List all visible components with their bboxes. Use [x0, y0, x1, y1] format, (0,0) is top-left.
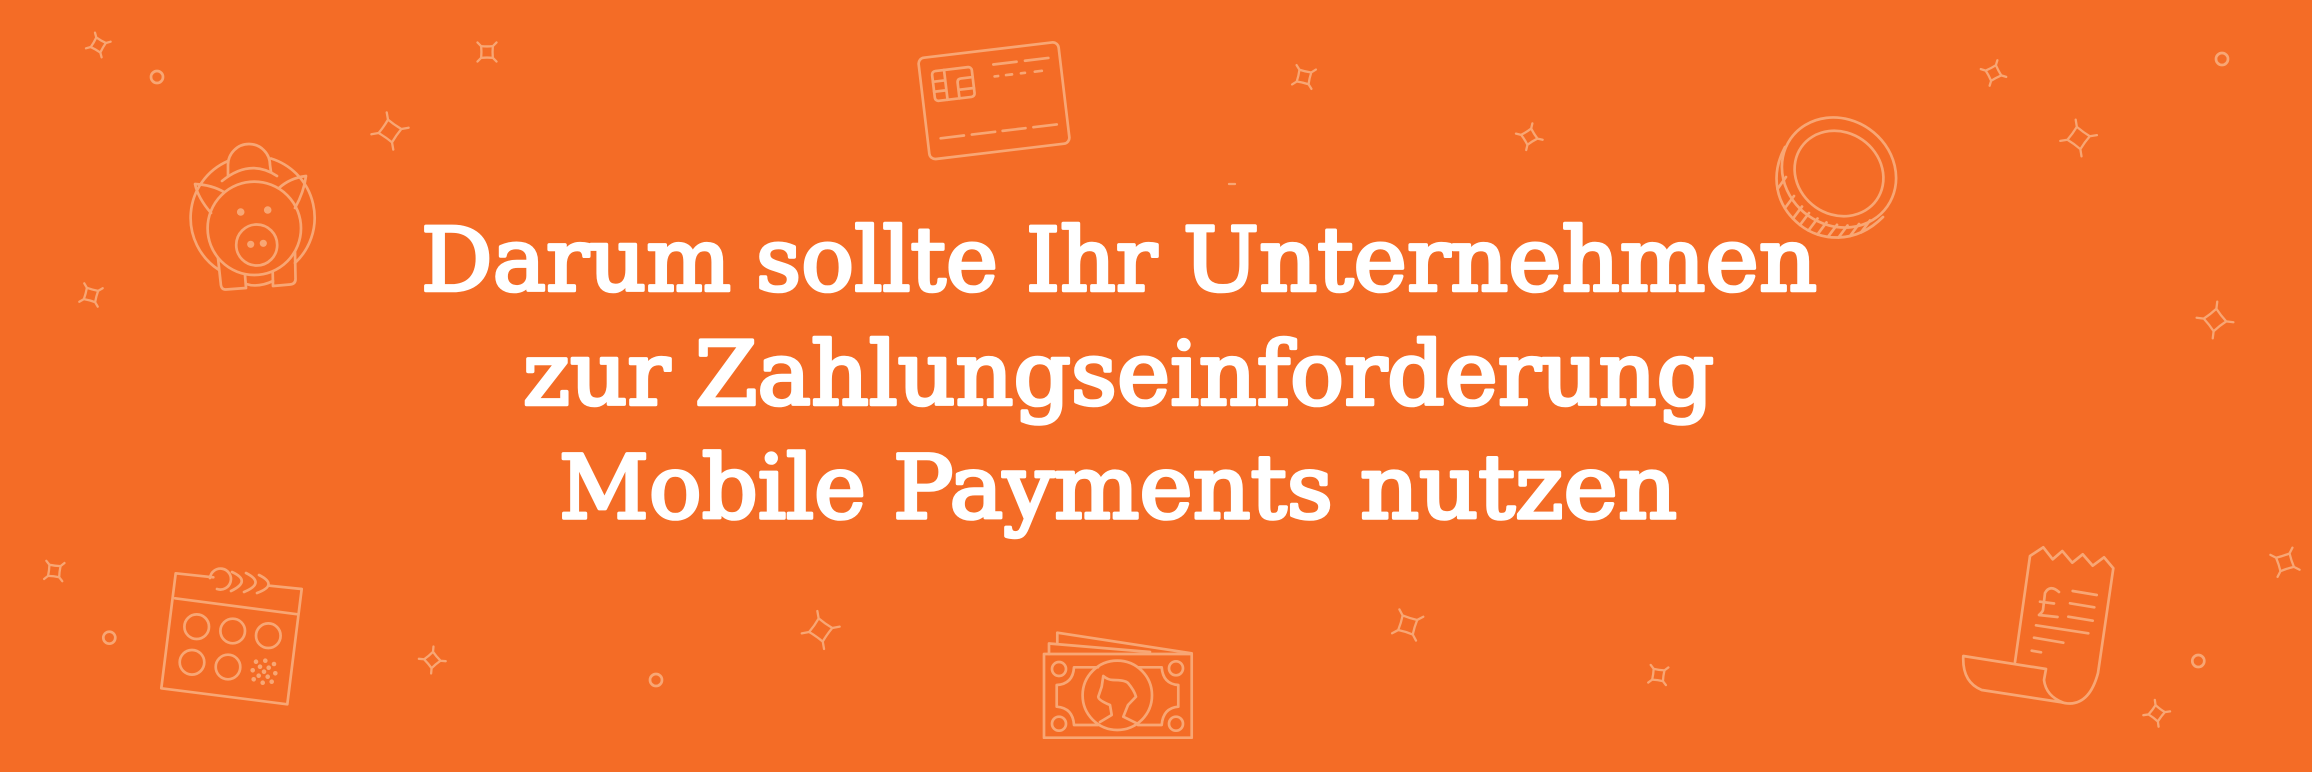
icon: banknotes	[1044, 633, 1192, 738]
icon: credit card	[918, 42, 1070, 160]
icon: piggy bank	[191, 144, 315, 290]
title line 1: Ihr	[1026, 208, 1158, 312]
title line 1: Unternehmen	[1183, 208, 1817, 312]
title line 1	[421, 208, 1817, 312]
title line 3: nutzen	[1360, 436, 1677, 539]
icon: receipt	[1963, 547, 2113, 704]
title line 3: Payments	[893, 436, 1333, 539]
title line 1: Darum	[421, 208, 731, 312]
title	[421, 208, 1817, 539]
title line 3: Mobile	[559, 436, 866, 539]
title line 2: Zahlungseinforderung	[695, 322, 1714, 426]
title line 1: sollte	[756, 208, 998, 312]
icon: coin	[1760, 95, 1918, 250]
title line 2: zur	[523, 322, 671, 426]
icon: calendar	[161, 569, 302, 704]
title line 3	[559, 436, 1677, 539]
